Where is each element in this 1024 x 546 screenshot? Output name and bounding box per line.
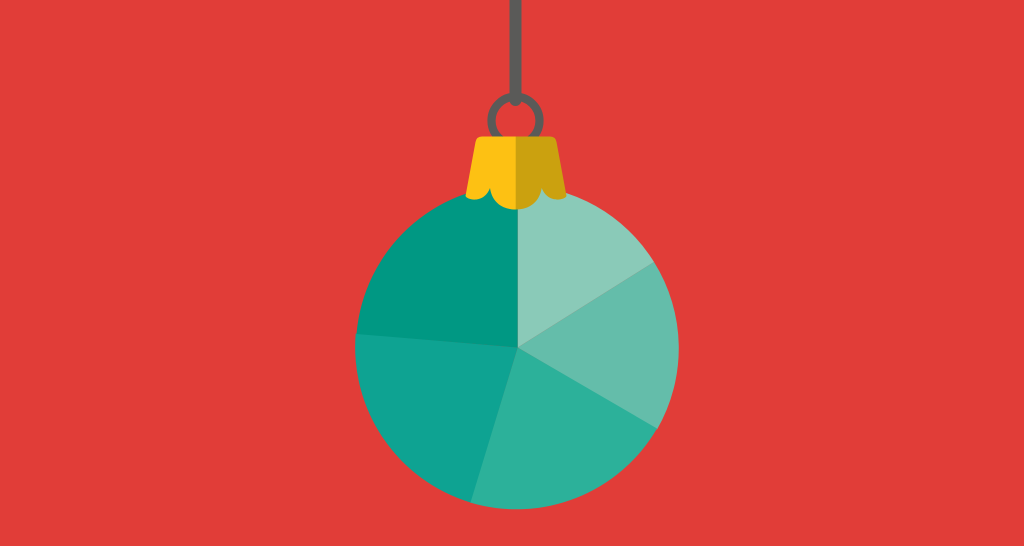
cap: left half [466, 136, 516, 210]
hanging string [510, 0, 522, 106]
slice: top right [518, 185, 654, 348]
slice: right [518, 262, 679, 430]
slice: top left [356, 185, 518, 348]
slice: bottom left [355, 334, 518, 502]
slice: bottom [470, 348, 657, 509]
cap: right half [516, 136, 566, 210]
ring [492, 97, 540, 145]
ornament cap [466, 136, 566, 210]
ornament pie chart [355, 185, 679, 509]
